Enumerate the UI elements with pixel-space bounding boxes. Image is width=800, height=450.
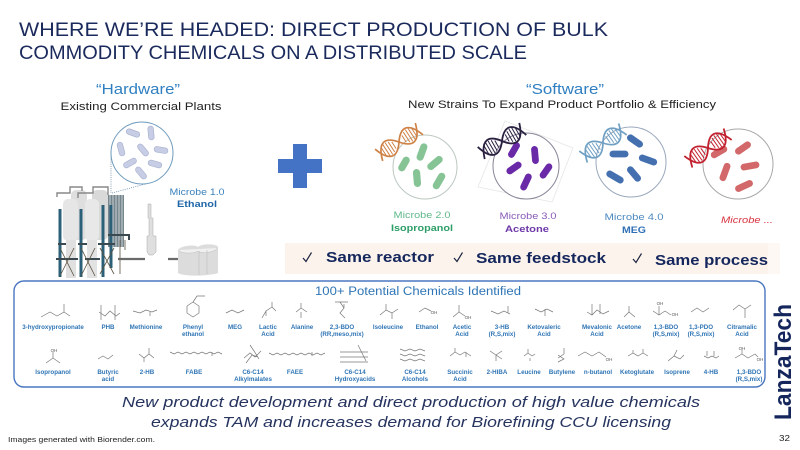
C6-C14 Alkylmalates: C6-C14 — [242, 369, 264, 376]
Butylene: Butylene — [549, 369, 576, 376]
C6-C14 Alcohols — [400, 349, 429, 383]
3-hydroxypropionate — [22, 304, 84, 331]
same feedstock: Same feedstock — [476, 250, 607, 267]
Ethanol — [416, 308, 439, 331]
Phenyl ethanol: Phenyl — [183, 324, 203, 331]
Alanine: Alanine — [291, 324, 314, 331]
microbe 4.0 — [579, 122, 666, 197]
label: microbe 4.0 — [604, 212, 664, 236]
1,3-BDO: (R,S,mix) — [653, 331, 679, 338]
Alanine — [291, 303, 314, 331]
same reactor: Same reactor — [326, 249, 434, 266]
Ketovaleric Acid: Ketovaleric — [527, 324, 561, 331]
1,3-PDO — [688, 308, 714, 338]
C6-C14 Hydroxyacids: C6-C14 — [344, 369, 366, 376]
label: microbe 1.0: Microbe 1.0 — [170, 187, 224, 198]
FAEE — [269, 352, 325, 376]
Ketoglutate: Ketoglutate — [620, 369, 655, 376]
1,3-BDO mix: OH — [757, 357, 763, 362]
bottom statement: New product development and direct production of high value chemicals — [122, 395, 700, 411]
icon: red dna — [684, 127, 732, 169]
icon: commercial plant — [56, 187, 218, 278]
zoom lines — [111, 155, 149, 193]
bottom statement: expands TAM and increases demand for Biorefining CCU licensing — [151, 415, 671, 431]
Isoleucine — [373, 304, 404, 331]
panel: chemicals — [14, 281, 765, 387]
Succinic Acid — [447, 348, 473, 383]
heading: hardware: Existing Commercial Plants — [60, 101, 222, 113]
label: microbe 4.0: MEG — [622, 225, 646, 236]
Acetic Acid: Acetic — [453, 324, 472, 331]
footnote: Images generated with Biorender.com. — [8, 435, 155, 444]
4-HB: 4-HB — [704, 369, 719, 376]
C6-C14 Alcohols: Alcohols — [402, 376, 429, 383]
panel heading: 100+ Potential Chemicals Identified — [315, 286, 521, 298]
page number: 32 — [779, 433, 790, 443]
Butyric acid: acid — [102, 376, 114, 383]
panel: same reactor, feedstock, process — [285, 243, 780, 274]
Butyric acid: Butyric — [97, 369, 119, 376]
Isoleucine: Isoleucine — [373, 324, 404, 331]
Lactic Acid — [259, 302, 277, 338]
icon: dark dna — [477, 122, 527, 160]
1,3-BDO mix: 1,3-BDO — [737, 369, 761, 376]
Succinic Acid: Succinic — [447, 369, 473, 376]
Isopropanol: Isopropanol — [35, 369, 71, 376]
PHB — [99, 305, 120, 331]
label: microbe 3.0 — [500, 211, 556, 235]
MEG: MEG — [228, 324, 242, 331]
heading: software — [408, 82, 717, 111]
2-HB — [139, 348, 155, 376]
Citramalic Acid: Acid — [735, 331, 749, 338]
Isopropanol: OH — [51, 348, 57, 353]
Ketovaleric Acid — [527, 309, 561, 338]
heading: hardware — [60, 82, 222, 113]
Ketovaleric Acid: Acid — [537, 331, 551, 338]
n-butanol: OH — [606, 357, 612, 362]
label: microbe 3.0: Acetone — [505, 224, 549, 235]
PHB: PHB — [101, 324, 115, 331]
MEG — [226, 310, 244, 331]
Acetone: Acetone — [617, 324, 642, 331]
C6-C14 Hydroxyacids: Hydroxyacids — [335, 376, 376, 383]
1,3-PDO: (R,S,mix) — [688, 331, 714, 338]
Isoprene: Isoprene — [664, 369, 690, 376]
FABE — [170, 352, 222, 376]
microbe 3.0 — [477, 121, 573, 202]
check marks — [303, 252, 642, 262]
Ethanol: Ethanol — [416, 324, 439, 331]
Leucine — [517, 349, 541, 376]
label: microbe next: Microbe ... — [721, 215, 773, 226]
Phenyl ethanol: ethanol — [182, 331, 204, 338]
2-HB: 2-HB — [140, 369, 155, 376]
label: microbe 2.0: Microbe 2.0 — [394, 210, 450, 221]
4-HB — [704, 351, 719, 376]
Phenyl ethanol — [182, 296, 205, 338]
icon: orange dna — [374, 122, 424, 162]
icon: plus — [278, 144, 322, 188]
Butyric acid — [97, 355, 119, 383]
3-HB: (R,S,mix) — [489, 331, 515, 338]
Acetic Acid: Acid — [455, 331, 469, 338]
2-HIBA: 2-HIBA — [487, 369, 508, 376]
label: microbe 2.0: Isopropanol — [391, 223, 453, 234]
Lactic Acid: Acid — [261, 331, 275, 338]
C6-C14 Alcohols: C6-C14 — [404, 369, 426, 376]
n-butanol: n-butanol — [584, 369, 612, 376]
Acetic Acid — [453, 305, 472, 338]
heading: hardware: “Hardware” — [96, 82, 180, 98]
Butylene — [549, 348, 576, 376]
Isoprene — [664, 350, 690, 376]
C6-C14 Alkylmalates — [234, 345, 272, 383]
Ethanol: OH — [431, 310, 437, 315]
2,3-BDO: 2,3-BDO — [330, 324, 354, 331]
n-butanol — [578, 352, 612, 376]
1,3-BDO — [653, 301, 679, 338]
label: microbe 3.0: Microbe 3.0 — [500, 211, 556, 222]
C6-C14 Alkylmalates: Alkylmalates — [234, 376, 272, 383]
microbe 2.0 — [374, 122, 457, 199]
FAEE: FAEE — [287, 369, 303, 376]
Acetic Acid: OH — [465, 315, 471, 320]
1,3-BDO mix — [735, 346, 763, 383]
1,3-BDO mix: (R,S,mix) — [736, 376, 762, 383]
icon: blue dna — [579, 122, 627, 164]
Citramalic Acid: Citramalic — [727, 324, 758, 331]
1,3-BDO: 1,3-BDO — [654, 324, 678, 331]
same process: Same process — [655, 252, 768, 269]
3-hydroxypropionate: 3-hydroxypropionate — [22, 324, 84, 331]
Isopropanol — [35, 348, 71, 376]
3-HB — [489, 306, 515, 338]
title — [19, 19, 608, 64]
Citramalic Acid — [727, 305, 758, 338]
icon: storage tanks — [178, 244, 218, 276]
heading: software: “Software” — [526, 82, 604, 98]
1,3-BDO mix: OH — [739, 346, 745, 351]
Mevalonic Acid: Mevalonic — [582, 324, 613, 331]
1,3-BDO: OH — [672, 312, 678, 317]
Mevalonic Acid: Acid — [590, 331, 604, 338]
Lactic Acid: Lactic — [259, 324, 277, 331]
C6-C14 Hydroxyacids — [335, 345, 376, 383]
label: microbe 2.0 — [391, 210, 453, 234]
icon: microbe 1.0 circle — [111, 122, 173, 184]
label: microbe 4.0: Microbe 4.0 — [604, 212, 664, 223]
FABE: FABE — [186, 369, 202, 376]
2,3-BDO — [320, 302, 364, 338]
Ketoglutate — [620, 349, 655, 376]
title: COMMODITY CHEMICALS ON A DISTRIBUTED SCALE — [19, 42, 527, 64]
microbe next — [684, 127, 773, 199]
Acetone — [617, 306, 642, 331]
2-HIBA — [487, 351, 508, 376]
1,3-PDO: 1,3-PDO — [689, 324, 713, 331]
label: microbe 1.0 — [170, 187, 224, 210]
3-HB: 3-HB — [495, 324, 510, 331]
Leucine: Leucine — [517, 369, 541, 376]
title: WHERE WE’RE HEADED: DIRECT PRODUCTION OF BULK — [19, 19, 608, 41]
bottom statement — [122, 395, 700, 431]
label: microbe 1.0: Ethanol — [177, 199, 217, 210]
Methionine: Methionine — [130, 324, 163, 331]
Mevalonic Acid — [582, 304, 613, 338]
heading: software: New Strains To Expand Product Portfolio & Efficiency — [408, 99, 717, 111]
1,3-BDO: OH — [657, 301, 663, 306]
2,3-BDO: (RR,meso,mix) — [320, 331, 364, 338]
Succinic Acid: Acid — [453, 376, 467, 383]
icon: tower — [147, 204, 156, 255]
logo: LanzaTech: LanzaTech — [770, 304, 797, 420]
Methionine — [130, 310, 163, 331]
